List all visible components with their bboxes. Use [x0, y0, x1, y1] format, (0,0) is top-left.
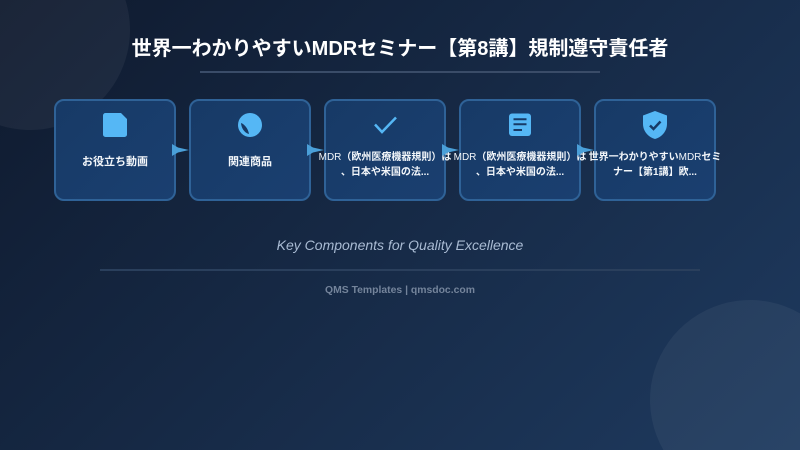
- title underline: [200, 71, 600, 73]
- panel: card 3: [324, 99, 446, 201]
- label: card 5: [589, 151, 721, 178]
- decorative circle: top left: [0, 0, 130, 130]
- label: card 3: [319, 151, 451, 178]
- label: card 4: 、日本や米国の法...: [476, 167, 564, 178]
- label: card 3: MDR（欧州医療機器規則）は: [319, 152, 451, 163]
- arrow 1: [172, 144, 189, 156]
- icon: shield check: [643, 111, 667, 139]
- arrow 2: [307, 144, 324, 156]
- icon: globe: [238, 113, 262, 137]
- label: card 1: お役立ち動画: [82, 156, 148, 168]
- icon: article: [509, 114, 531, 136]
- decorative circle: bottom right: [650, 300, 800, 450]
- arrow 4: [577, 144, 594, 156]
- footer divider: [100, 269, 700, 271]
- panel: card 2: [189, 99, 311, 201]
- arrow 3: [442, 144, 459, 156]
- panel: card 5: [594, 99, 716, 201]
- label: card 2: 関連商品: [228, 156, 272, 168]
- label: card 5: ナー【第1講】欧...: [613, 167, 697, 178]
- subtitle: Key Components for Quality Excellence: [277, 237, 523, 253]
- icon: check: [374, 116, 397, 134]
- footer: QMS Templates | qmsdoc.com: [325, 285, 475, 296]
- panel: card 1: [54, 99, 176, 201]
- label: card 4: [454, 151, 586, 178]
- label: card 4: MDR（欧州医療機器規則）は: [454, 152, 586, 163]
- label: card 3: 、日本や米国の法...: [341, 167, 429, 178]
- icon: document: [103, 113, 127, 137]
- title: 世界一わかりやすいMDRセミナー【第8講】規制遵守責任者: [132, 38, 668, 60]
- label: card 5: 世界一わかりやすいMDRセミ: [589, 152, 721, 163]
- panel: card 4: [459, 99, 581, 201]
